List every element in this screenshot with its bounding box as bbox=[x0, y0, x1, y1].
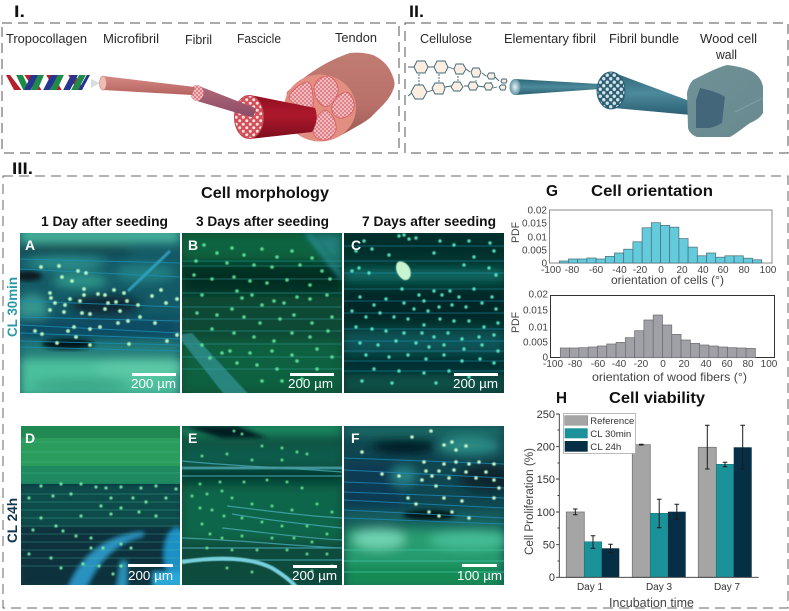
x axis labels: -80 bbox=[568, 359, 583, 370]
y axis labels: 0.015 bbox=[523, 306, 548, 316]
scale bars: 200 µm bbox=[292, 568, 337, 583]
legend bbox=[564, 414, 636, 454]
scale bars: 200 µm bbox=[288, 376, 333, 391]
scale bars: 200 µm bbox=[128, 568, 173, 583]
tendon hierarchy labels: Microfibril bbox=[103, 32, 159, 46]
tendon hierarchy labels: Fibril bbox=[185, 33, 212, 47]
micrograph D bbox=[21, 426, 180, 585]
x axis labels bbox=[541, 265, 777, 276]
x axis labels: 20 bbox=[678, 359, 690, 370]
y axis labels: 150 bbox=[537, 474, 555, 486]
y axis labels: 200 bbox=[537, 442, 555, 454]
wood hierarchy labels: Elementary fibril bbox=[504, 32, 596, 46]
y axis labels bbox=[523, 290, 548, 364]
x axis labels: Day 7 bbox=[714, 582, 740, 593]
y axis labels: 100 bbox=[537, 507, 555, 519]
wood hierarchy labels: Cellulose bbox=[420, 32, 472, 46]
histogram: orientation of wood fibers: PDF bbox=[510, 312, 522, 333]
x axis labels: 0 bbox=[658, 265, 664, 276]
x axis labels: -20 bbox=[634, 359, 649, 370]
micrograph B bbox=[182, 233, 342, 393]
scale bars bbox=[128, 373, 502, 583]
micrograph A bbox=[20, 233, 180, 393]
x axis labels bbox=[577, 582, 740, 593]
histogram: orientation of cells: PDF bbox=[510, 222, 522, 243]
micrograph F bbox=[344, 426, 504, 585]
icon: cellulose chain bbox=[408, 61, 507, 99]
wood hierarchy labels: Fibril bundle bbox=[609, 32, 679, 46]
bar chart: cell proliferation: Cell Proliferation (%) bbox=[524, 448, 536, 555]
x axis labels: -20 bbox=[633, 265, 648, 276]
row label: CL 30min: CL 30min bbox=[4, 277, 20, 337]
panel II: wood hierarchy dashed frame bbox=[405, 23, 788, 153]
heading: H cell viability bbox=[556, 390, 705, 407]
x axis labels: 60 bbox=[721, 359, 733, 370]
wood hierarchy labels: Wood cell bbox=[700, 32, 757, 46]
heading: G cell orientation bbox=[546, 183, 713, 200]
section I label: I. bbox=[14, 2, 25, 21]
error bars bbox=[573, 425, 745, 553]
y axis labels: 0.015 bbox=[522, 218, 547, 230]
tendon hierarchy labels: Fascicle bbox=[237, 32, 281, 46]
x axis labels bbox=[543, 359, 778, 370]
column headings: 7 Days after seeding bbox=[362, 214, 496, 229]
y axis labels: 0.02 bbox=[528, 206, 547, 216]
x axis labels: Day 3 bbox=[646, 582, 672, 593]
y axis labels: 0 bbox=[541, 258, 547, 270]
column headings: 1 Day after seeding bbox=[41, 214, 168, 229]
axes bbox=[556, 414, 759, 577]
icon: fibril bundle bbox=[597, 72, 695, 115]
y axis labels: 0.02 bbox=[529, 290, 548, 300]
x axis labels: 20 bbox=[676, 265, 688, 276]
scale bars: 200 µm bbox=[453, 376, 498, 391]
panel letters: A bbox=[25, 237, 35, 253]
y axis labels: 0.005 bbox=[522, 246, 547, 256]
x axis labels: -40 bbox=[612, 359, 627, 370]
x axis labels: -100 bbox=[543, 359, 563, 370]
x axis labels: -40 bbox=[612, 265, 627, 276]
histogram: orientation of wood fibers: orientation of wood fibers (°) bbox=[592, 370, 747, 384]
icon: fibril bbox=[190, 85, 255, 117]
tendon hierarchy labels bbox=[6, 31, 377, 47]
scale bars: 200 µm bbox=[131, 376, 176, 391]
scale bars: 100 µm bbox=[457, 568, 502, 583]
x axis labels: 100 bbox=[761, 359, 778, 370]
legend: CL 24h bbox=[590, 442, 621, 453]
y axis labels: 0.01 bbox=[529, 322, 548, 334]
y axis labels: 0.01 bbox=[528, 232, 547, 244]
wood hierarchy labels: wall bbox=[715, 48, 737, 62]
x axis labels: 80 bbox=[742, 359, 754, 370]
y axis labels bbox=[537, 409, 555, 584]
wood hierarchy labels bbox=[420, 32, 757, 62]
x axis labels: -60 bbox=[591, 359, 606, 370]
panel III: cell study dashed frame bbox=[3, 176, 788, 608]
panel letters: C bbox=[351, 237, 361, 253]
x axis labels: 80 bbox=[738, 265, 750, 276]
legend: Reference bbox=[590, 416, 634, 427]
histogram: orientation of wood fibers bbox=[510, 290, 778, 384]
row label: CL 24h: CL 24h bbox=[4, 498, 20, 543]
x axis labels: 40 bbox=[700, 359, 712, 370]
heading: cell morphology: Cell morphology bbox=[201, 185, 329, 202]
y axis labels: 50 bbox=[543, 540, 555, 552]
x axis labels: -60 bbox=[589, 265, 604, 276]
histogram: orientation of cells: orientation of cells (°) bbox=[611, 273, 724, 287]
x axis labels: 100 bbox=[760, 265, 777, 276]
column headings bbox=[41, 214, 496, 229]
section III label: III. bbox=[12, 159, 33, 178]
panel letters: F bbox=[351, 430, 360, 446]
heading: G cell orientation: Cell orientation bbox=[591, 183, 713, 200]
x axis labels: Day 1 bbox=[577, 582, 603, 593]
tendon hierarchy labels: Tendon bbox=[335, 31, 377, 45]
icon: microfibril bbox=[100, 76, 195, 95]
panel letters: D bbox=[25, 430, 35, 446]
y axis labels: 0 bbox=[542, 352, 548, 364]
x axis labels: 40 bbox=[697, 265, 709, 276]
section II label: II. bbox=[409, 2, 424, 21]
icon: fascicle bbox=[234, 95, 317, 139]
tendon hierarchy labels: Tropocollagen bbox=[6, 32, 87, 46]
x axis labels: -80 bbox=[565, 265, 580, 276]
icon: tropocollagen triple helix bbox=[6, 75, 100, 90]
heading: H cell viability: Cell viability bbox=[609, 390, 705, 407]
column headings: 3 Days after seeding bbox=[196, 214, 329, 229]
x axis labels: -100 bbox=[541, 265, 561, 276]
x axis labels: 60 bbox=[717, 265, 729, 276]
micrograph E bbox=[182, 426, 342, 585]
micrograph C bbox=[344, 233, 504, 393]
panel letters bbox=[25, 237, 361, 446]
heading: H cell viability: H bbox=[556, 390, 567, 407]
bar chart: cell proliferation: Incubation time bbox=[609, 596, 694, 610]
y axis labels: 0 bbox=[549, 572, 555, 584]
y axis labels: 250 bbox=[537, 409, 555, 421]
x axis labels: 0 bbox=[660, 359, 666, 370]
y axis labels: 0.005 bbox=[523, 338, 548, 348]
bar chart: cell proliferation bbox=[524, 409, 759, 610]
legend: CL 30min bbox=[590, 429, 631, 440]
histogram: orientation of cells bbox=[510, 206, 777, 287]
icon: elementary fibril bbox=[510, 79, 600, 95]
icon: wood cell wall bbox=[687, 65, 763, 137]
panel letters: E bbox=[188, 430, 197, 446]
panel I: tendon hierarchy dashed frame bbox=[2, 23, 399, 153]
tendon fascicle lobes bbox=[289, 76, 354, 140]
y axis labels bbox=[522, 206, 547, 270]
icon: tendon bbox=[284, 53, 394, 142]
heading: G cell orientation: G bbox=[546, 183, 558, 200]
panel letters: B bbox=[188, 237, 198, 253]
